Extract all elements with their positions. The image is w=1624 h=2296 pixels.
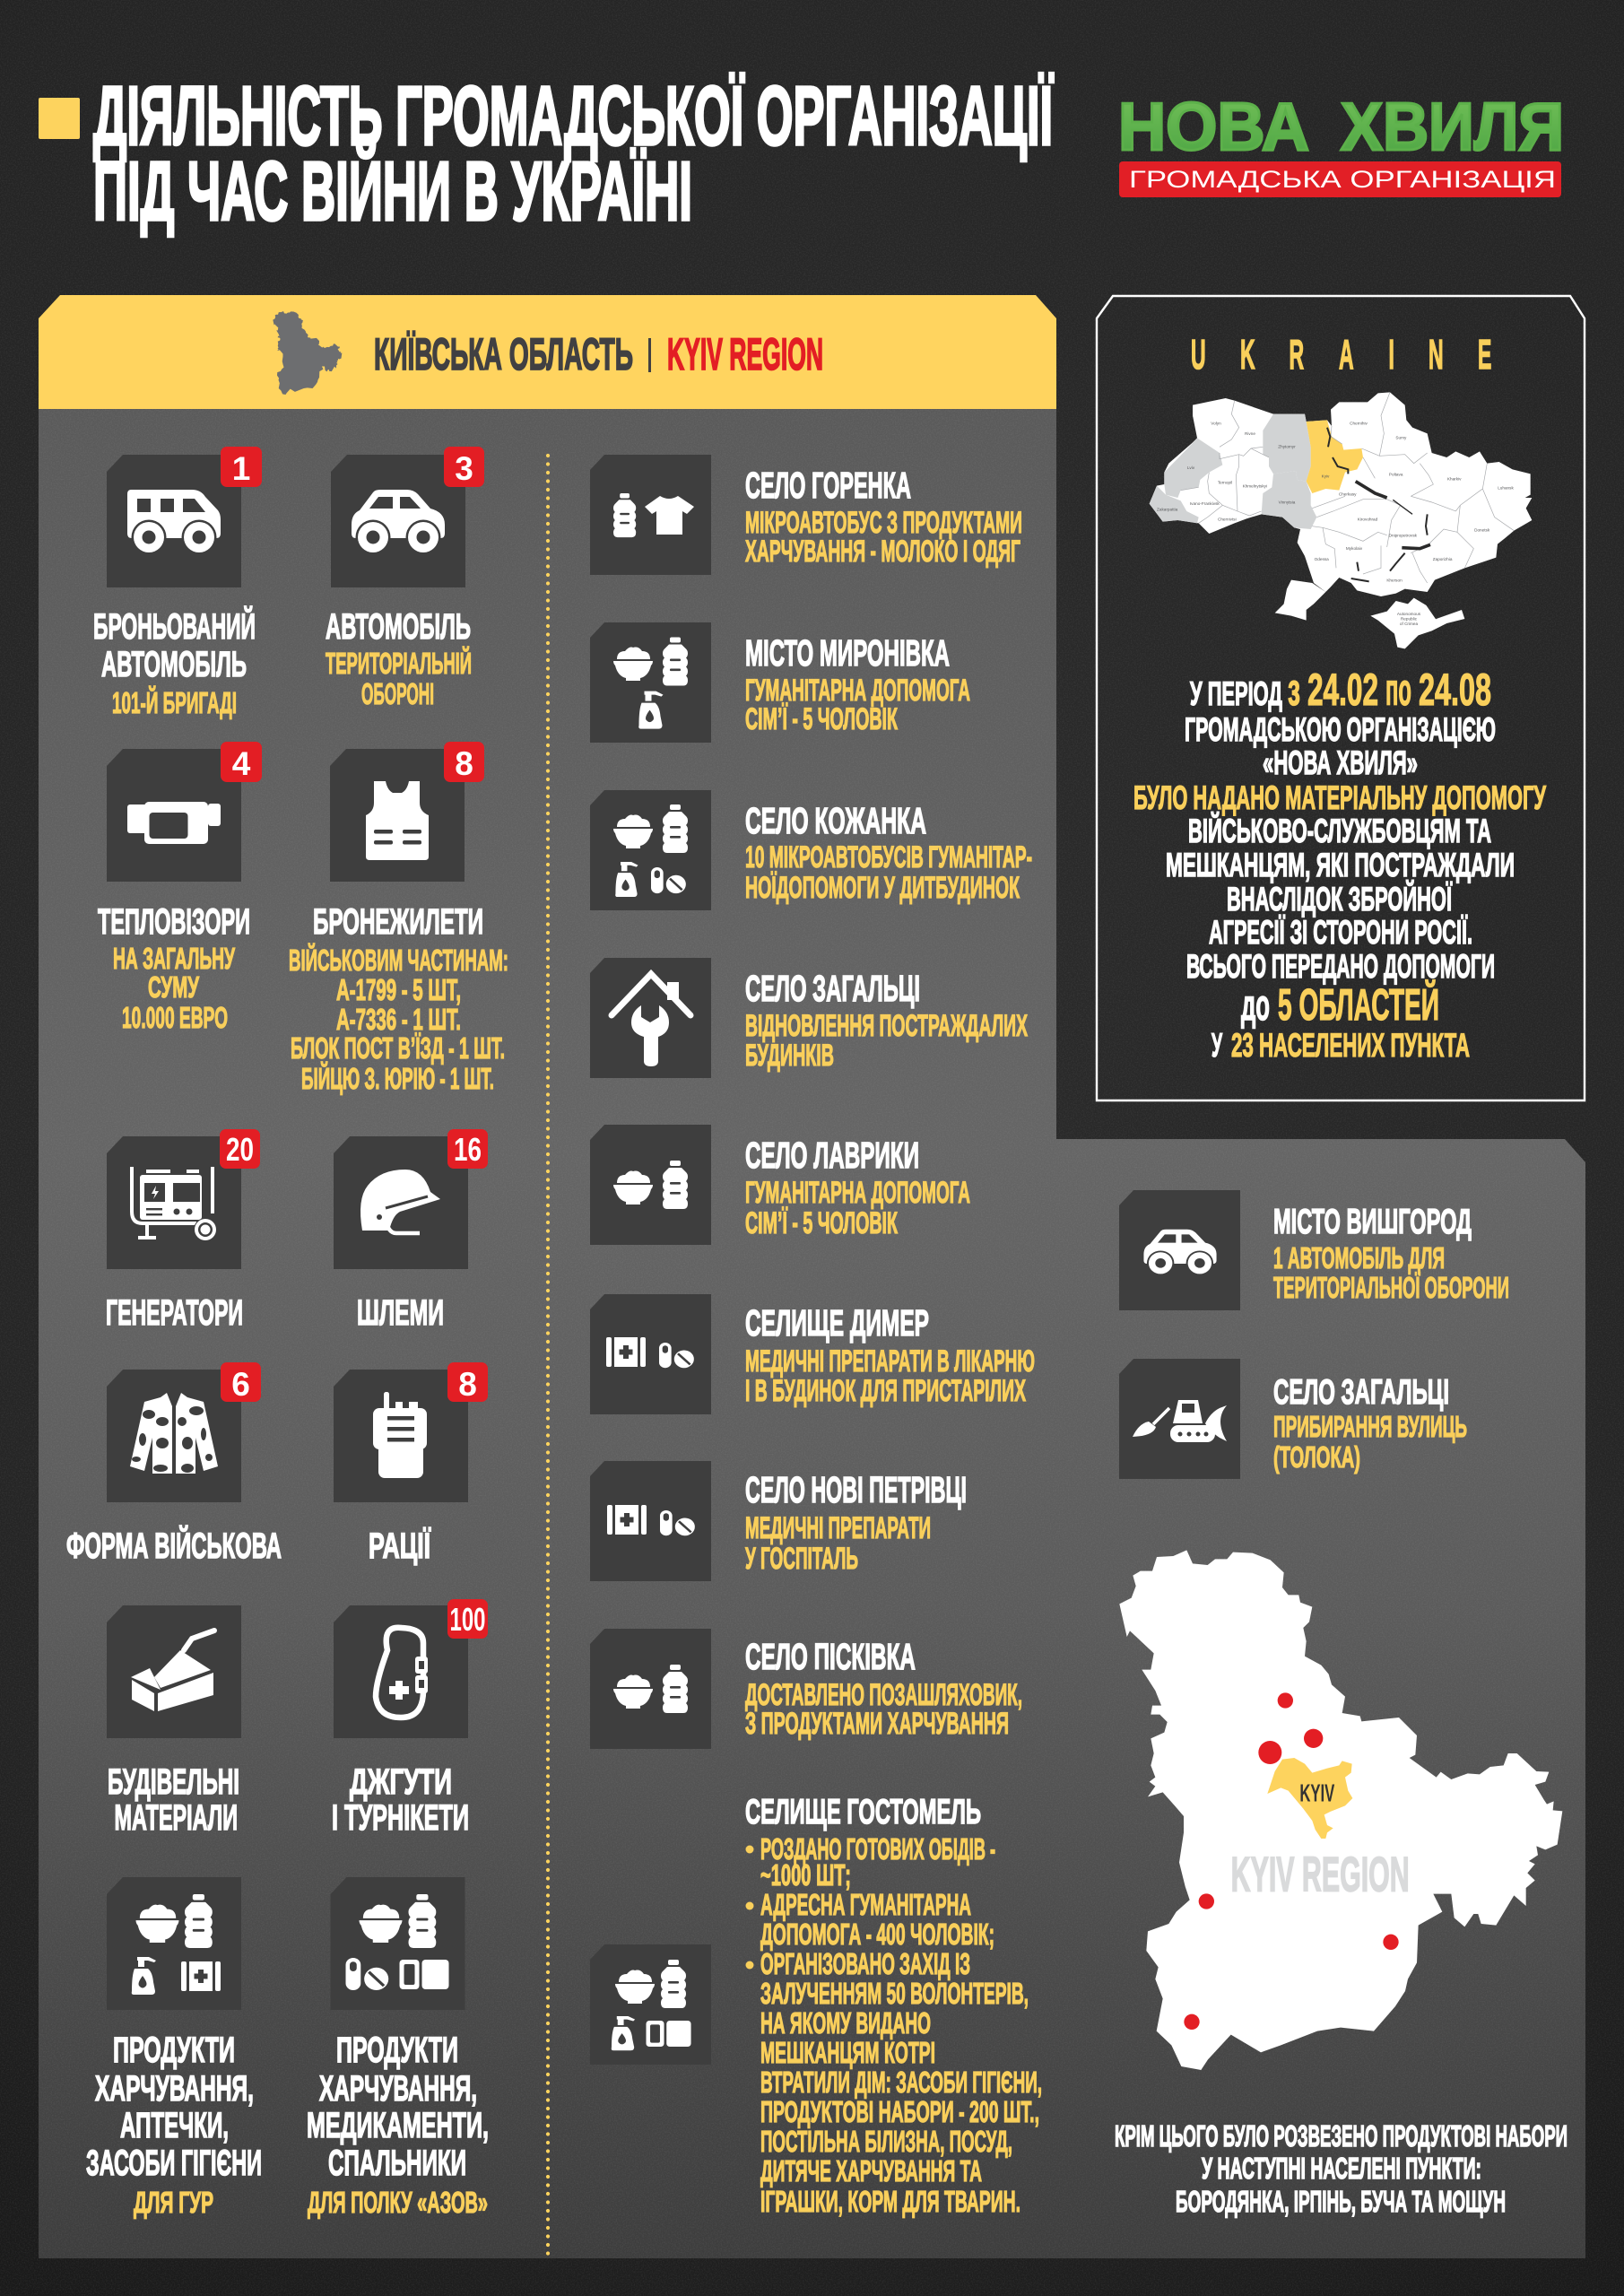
text: ГУМАНІТАРНА ДОПОМОГА bbox=[745, 1176, 970, 1210]
icon: vest bbox=[330, 749, 465, 882]
text: БУДИНКІВ bbox=[745, 1039, 834, 1073]
label: ДЛЯ ГУР bbox=[134, 2186, 213, 2219]
label: ХАРЧУВАННЯ, bbox=[95, 2069, 254, 2109]
map: Ukraine regions: Chernivtsi bbox=[1218, 517, 1237, 522]
map: Ukraine regions: Odessa bbox=[1315, 557, 1329, 561]
icon: generator bbox=[107, 1136, 241, 1269]
label bbox=[326, 607, 472, 710]
label: БІЙЦЮ З. ЮРІЮ - 1 ШТ. bbox=[301, 1061, 494, 1095]
text bbox=[745, 1793, 1042, 2218]
map: Ukraine regions: Lviv bbox=[1187, 465, 1195, 470]
icon: car bbox=[331, 455, 465, 587]
label: БРОНЕЖИЛЕТИ bbox=[313, 902, 483, 942]
badge: 16: 16 bbox=[454, 1131, 482, 1168]
label: 10.000 ЕВРО bbox=[122, 1001, 228, 1034]
text: МЕШКАНЦЯМ КОТРІ bbox=[760, 2036, 935, 2069]
badge: 8 bbox=[447, 1362, 488, 1403]
note on food parcels bbox=[1115, 2119, 1568, 2218]
label: А-1799 - 5 ШТ, bbox=[336, 973, 461, 1006]
icon: food, water, pills, sleeping mat bbox=[330, 1877, 465, 2010]
icon: carabiner tourniquet bbox=[334, 1605, 468, 1738]
text: МІСТО ВИШГОРОД bbox=[1273, 1203, 1472, 1241]
header label: КИЇВСЬКА ОБЛАСТЬ bbox=[374, 329, 633, 379]
map: Ukraine regions: Dnipropetrovsk bbox=[1389, 534, 1418, 538]
map: Ukraine regions: Chernihiv bbox=[1350, 422, 1368, 426]
summary text: ВНАСЛІДОК ЗБРОЙНОЇ bbox=[1227, 880, 1452, 918]
badge: 4 bbox=[221, 742, 262, 782]
map: Ukraine regions: Poltava bbox=[1389, 473, 1403, 477]
icon: helmet bbox=[334, 1136, 468, 1269]
text: РОЗДАНО ГОТОВИХ ОБІДІВ - bbox=[760, 1832, 995, 1866]
map: Ukraine regions: Kyiv bbox=[1322, 474, 1330, 479]
label bbox=[86, 2031, 262, 2219]
label: АВТОМОБІЛЬ bbox=[326, 607, 471, 647]
label: І ТУРНІКЕТИ bbox=[332, 1798, 469, 1838]
map: Ukraine regions: Ivano-Frankivsk bbox=[1190, 501, 1220, 506]
summary text: з bbox=[1288, 665, 1300, 715]
map: Ukraine regions: of Crimea bbox=[1400, 622, 1418, 626]
Kyiv city shape bbox=[1267, 1758, 1352, 1839]
text bbox=[1273, 1373, 1467, 1474]
summary text: до bbox=[1241, 982, 1270, 1030]
text: 10 МІКРОАВТОБУСІВ ГУМАНІТАР- bbox=[745, 840, 1032, 874]
map: Ukraine regions: Zhytomyr bbox=[1278, 445, 1296, 449]
item: body armour bbox=[289, 742, 508, 1095]
map: Ukraine regions: Kharkiv bbox=[1447, 476, 1462, 481]
text: СЕЛО ЗАГАЛЬЦІ bbox=[1273, 1373, 1449, 1412]
text: СЕЛО ГОРЕНКА bbox=[745, 465, 911, 506]
badge: 1: 1 bbox=[232, 450, 250, 487]
icon: walkie talkie bbox=[334, 1370, 468, 1502]
text: СЕЛИЩЕ ГОСТОМЕЛЬ bbox=[745, 1793, 981, 1831]
text: ПОСТІЛЬНА БІЛИЗНА, ПОСУД, bbox=[760, 2125, 1012, 2158]
label: Kyiv region: KYIV REGION bbox=[1231, 1846, 1410, 1901]
map: Kyiv region bbox=[1119, 1550, 1562, 2070]
text bbox=[745, 1135, 970, 1240]
badge: 3: 3 bbox=[455, 450, 473, 487]
icon: minibus bbox=[107, 455, 241, 587]
dotted divider bbox=[546, 456, 550, 2257]
main title: ПІД ЧАС ВІЙНИ В УКРАЇНІ bbox=[93, 144, 692, 238]
map: Ukraine regions: Autonomous bbox=[1397, 612, 1421, 616]
text: ДОСТАВЛЕНО ПОЗАШЛЯХОВИК, bbox=[745, 1678, 1022, 1712]
label: ДЖГУТИ bbox=[350, 1762, 452, 1802]
logo: Нова Хвиля bbox=[1118, 89, 1564, 197]
text: ЗАЛУЧЕННЯМ 50 ВОЛОНТЕРІВ, bbox=[760, 1977, 1029, 2010]
label: СУМУ bbox=[148, 970, 199, 1004]
entry: Пісківка bbox=[590, 1629, 1022, 1749]
header label: KYIV REGION bbox=[667, 329, 823, 379]
entry: Загальці bbox=[590, 958, 1028, 1078]
text bbox=[745, 968, 1028, 1073]
label: РАЦІЇ bbox=[369, 1526, 431, 1566]
text bbox=[745, 465, 1022, 569]
label bbox=[93, 605, 256, 719]
text: ХАРЧУВАННЯ - МОЛОКО І ОДЯГ bbox=[745, 535, 1020, 569]
map: Ukraine regions: Zakarpattia bbox=[1157, 508, 1178, 512]
badge: 4: 4 bbox=[232, 745, 251, 782]
icon: food and water bbox=[590, 1125, 711, 1245]
icon: food and water bbox=[590, 1629, 711, 1749]
map: Ukraine regions: Cherkasy bbox=[1339, 492, 1357, 497]
badge: 3 bbox=[444, 447, 484, 487]
map: Ukraine regions: Rivne bbox=[1245, 431, 1255, 436]
text: ДОПОМОГА - 400 ЧОЛОВІК; bbox=[760, 1918, 994, 1951]
badge: 6: 6 bbox=[231, 1366, 250, 1403]
text: СЕЛО КОЖАНКА bbox=[745, 800, 926, 841]
panel: supplied items grid bbox=[66, 447, 508, 2219]
text: ~1000 ШТ; bbox=[760, 1858, 851, 1892]
item: generators bbox=[106, 1129, 260, 1333]
red location dots bbox=[1184, 1692, 1399, 2030]
badge: 8: 8 bbox=[458, 1366, 477, 1403]
text bbox=[745, 1302, 1035, 1408]
panel: Ukraine summary bbox=[1097, 296, 1585, 1100]
map: Ukraine regions: Kherson bbox=[1386, 578, 1403, 583]
label bbox=[307, 2031, 489, 2219]
entry: Вишгород bbox=[1119, 1190, 1509, 1310]
badge: 6 bbox=[221, 1362, 261, 1403]
text: ПРОДУКТОВІ НАБОРИ - 200 ШТ., bbox=[760, 2095, 1039, 2128]
summary text: 24.08 bbox=[1419, 665, 1491, 715]
item: car bbox=[326, 447, 484, 710]
logo: Нова Хвиля: ГРОМАДСЬКА ОРГАНІЗАЦІЯ bbox=[1129, 166, 1556, 193]
icon: thermal imager bbox=[107, 749, 241, 882]
icon: house and wrench bbox=[590, 958, 711, 1078]
label bbox=[98, 902, 250, 1034]
icon: bottle and shirt bbox=[590, 455, 711, 575]
summary text bbox=[1133, 665, 1547, 1064]
summary text: 5 ОБЛАСТЕЙ bbox=[1278, 980, 1439, 1030]
entry: Димер bbox=[590, 1294, 1035, 1414]
entry: Гостомель bbox=[590, 1793, 1042, 2218]
item: helmets bbox=[334, 1129, 488, 1333]
item: building materials bbox=[107, 1605, 241, 1838]
item: thermal imagers bbox=[98, 742, 262, 1034]
logo: Нова Хвиля: НОВА bbox=[1118, 89, 1309, 164]
text: ПРИБИРАННЯ ВУЛИЦЬ bbox=[1273, 1410, 1467, 1443]
text: ГУМАНІТАРНА ДОПОМОГА bbox=[745, 674, 970, 708]
summary text: 23 НАСЕЛЕНИХ ПУНКТА bbox=[1231, 1027, 1470, 1064]
map: Ukraine regions: Republic bbox=[1401, 616, 1418, 621]
text: НОЇДОПОМОГИ У ДИТБУДИНОК bbox=[745, 871, 1020, 905]
text: АДРЕСНА ГУМАНІТАРНА bbox=[760, 1888, 971, 1921]
entry: Нові Петрівці bbox=[590, 1461, 967, 1581]
main title bbox=[93, 69, 1054, 238]
label: АВТОМОБІЛЬ bbox=[101, 645, 247, 684]
icon: camouflage jacket bbox=[107, 1370, 241, 1502]
label bbox=[332, 1762, 469, 1838]
text: СЕЛО ЗАГАЛЬЦІ bbox=[745, 968, 920, 1009]
summary text: У ПЕРІОД bbox=[1190, 675, 1282, 712]
label: ФОРМА ВІЙСЬКОВА bbox=[66, 1525, 282, 1566]
icon: first aid and pills bbox=[590, 1461, 711, 1581]
item: tourniquets bbox=[332, 1599, 488, 1838]
label: ШЛЕМИ bbox=[357, 1293, 444, 1333]
logo: Нова Хвиля: ХВИЛЯ bbox=[1341, 89, 1564, 164]
map: Ukraine regions: Mykolaiv bbox=[1346, 546, 1363, 551]
map: Ukraine regions: Luhansk bbox=[1498, 485, 1514, 490]
label: ТЕРИТОРІАЛЬНІЙ bbox=[326, 646, 472, 680]
label: БУДІВЕЛЬНІ bbox=[108, 1762, 239, 1802]
text bbox=[745, 1469, 967, 1576]
text bbox=[1273, 1203, 1509, 1304]
text: ОРГАНІЗОВАНО ЗАХІД ІЗ bbox=[760, 1947, 970, 1980]
map: Ukraine regions: Vinnytsia bbox=[1279, 500, 1296, 504]
icon: food, water, soap, first aid bbox=[107, 1877, 241, 2010]
text: СІМ’Ї - 5 ЧОЛОВІК bbox=[745, 1206, 898, 1240]
text: СЕЛО ПІСКІВКА bbox=[745, 1636, 916, 1677]
entry: Загальці cleanup bbox=[1119, 1359, 1467, 1479]
badge: 1 bbox=[221, 447, 262, 487]
label: НА ЗАГАЛЬНУ bbox=[113, 942, 235, 975]
label: Kyiv: KYIV bbox=[1299, 1779, 1335, 1806]
heading: Ukraine: UKRAINE bbox=[1191, 331, 1491, 378]
label: МЕДИКАМЕНТИ, bbox=[307, 2106, 489, 2145]
label: ЗАСОБИ ГІГІЄНИ bbox=[86, 2144, 262, 2183]
map: Ukraine regions: Ternopil bbox=[1218, 481, 1232, 485]
text: І В БУДИНОК ДЛЯ ПРИСТАРІЛИХ bbox=[745, 1374, 1026, 1408]
text: ДИТЯЧЕ ХАРЧУВАННЯ ТА bbox=[760, 2154, 982, 2187]
text: У ГОСПІТАЛЬ bbox=[745, 1542, 858, 1576]
item: radios bbox=[334, 1362, 488, 1566]
text: СЕЛО НОВІ ПЕТРІВЦІ bbox=[745, 1469, 967, 1510]
text: МІКРОАВТОБУС З ПРОДУКТАМИ bbox=[745, 506, 1022, 540]
badge: 8 bbox=[444, 742, 484, 782]
label: ХАРЧУВАННЯ, bbox=[319, 2069, 477, 2109]
entry: Горенка bbox=[590, 455, 1022, 575]
summary text: У bbox=[1211, 1027, 1223, 1064]
panel: Kyiv region extras bbox=[1115, 1190, 1568, 2218]
label: СПАЛЬНИКИ bbox=[328, 2144, 466, 2183]
label bbox=[289, 902, 508, 1095]
label: МАТЕРІАЛИ bbox=[115, 1798, 238, 1838]
icon: first aid and pills bbox=[590, 1294, 711, 1414]
label: ГЕНЕРАТОРИ bbox=[106, 1293, 243, 1333]
icon: brick and trowel bbox=[107, 1605, 241, 1738]
icon: food, water, soap, pills bbox=[590, 790, 711, 910]
text: МЕДИЧНІ ПРЕПАРАТИ В ЛІКАРНЮ bbox=[745, 1344, 1035, 1378]
map: Ukraine regions: Kirovohrad bbox=[1358, 517, 1378, 521]
badge: 20: 20 bbox=[226, 1131, 254, 1168]
text: МІСТО МИРОНІВКА bbox=[745, 632, 950, 674]
main grey panel bbox=[39, 409, 1585, 2258]
badge: 8: 8 bbox=[455, 745, 473, 782]
item: military uniform bbox=[66, 1362, 282, 1566]
icon: car bbox=[1119, 1190, 1240, 1310]
item: armoured vehicle bbox=[93, 447, 262, 719]
summary text: по bbox=[1385, 665, 1411, 715]
label: ТЕПЛОВІЗОРИ bbox=[98, 902, 250, 942]
label: ВІЙСЬКОВИМ ЧАСТИНАМ: bbox=[289, 943, 508, 977]
yellow header: Kyiv region bbox=[39, 295, 1056, 409]
text: НА ЯКОМУ ВИДАНО bbox=[760, 2006, 931, 2039]
map: Ukraine regions bbox=[1150, 392, 1532, 648]
map: Ukraine regions: Sumy bbox=[1395, 435, 1407, 439]
icon: Kyiv region silhouette bbox=[273, 311, 342, 395]
text: ВТРАТИЛИ ДІМ: ЗАСОБИ ГІГІЄНИ, bbox=[760, 2066, 1042, 2099]
entry: Кожанка bbox=[590, 790, 1032, 910]
label: А-7336 - 1 ШТ. bbox=[336, 1003, 461, 1036]
map: Ukraine regions: Donetsk bbox=[1474, 528, 1490, 533]
icon: food, water, soap bbox=[590, 622, 711, 743]
badge: 100 bbox=[447, 1599, 488, 1639]
text: 1 АВТОМОБІЛЬ ДЛЯ bbox=[1273, 1241, 1445, 1274]
label: ПРОДУКТИ bbox=[113, 2031, 235, 2070]
map: Ukraine regions: Volyn bbox=[1211, 421, 1221, 425]
text: МЕДИЧНІ ПРЕПАРАТИ bbox=[745, 1511, 931, 1545]
text: (ТОЛОКА) bbox=[1273, 1440, 1360, 1474]
item: food, first-aid kits, hygiene bbox=[86, 1877, 262, 2219]
icon: food, water, soap, sleeping mat bbox=[590, 1944, 711, 2065]
text bbox=[745, 1636, 1022, 1741]
text bbox=[745, 632, 970, 736]
text bbox=[745, 800, 1032, 905]
label: ПРОДУКТИ bbox=[336, 2031, 458, 2070]
title marker square bbox=[39, 98, 80, 139]
text: СЕЛО ЛАВРИКИ bbox=[745, 1135, 919, 1176]
label: БРОНЬОВАНИЙ bbox=[93, 605, 256, 647]
label: ОБОРОНІ bbox=[361, 677, 434, 710]
text: З ПРОДУКТАМИ ХАРЧУВАННЯ bbox=[745, 1707, 1009, 1741]
panel: settlements list bbox=[590, 455, 1042, 2218]
text: СІМ’Ї - 5 ЧОЛОВІК bbox=[745, 702, 898, 736]
entry: Лаврики bbox=[590, 1125, 970, 1245]
text: ВІДНОВЛЕННЯ ПОСТРАЖДАЛИХ bbox=[745, 1009, 1028, 1043]
label bbox=[108, 1762, 239, 1838]
label: 101-Й БРИГАДІ bbox=[112, 685, 237, 719]
label: БЛОК ПОСТ В’ЇЗД - 1 ШТ. bbox=[291, 1031, 505, 1065]
badge: 100: 100 bbox=[450, 1601, 486, 1638]
entry: Миронівка bbox=[590, 622, 970, 743]
text: СЕЛИЩЕ ДИМЕР bbox=[745, 1302, 929, 1344]
label: ДЛЯ ПОЛКУ «АЗОВ» bbox=[308, 2186, 488, 2219]
summary text: «НОВА ХВИЛЯ» bbox=[1263, 744, 1418, 781]
icon: broom and bulldozer bbox=[1119, 1359, 1240, 1479]
map: Ukraine regions: Zaporizhia bbox=[1433, 557, 1453, 561]
summary text: 24.02 bbox=[1307, 665, 1378, 715]
label: АПТЕЧКИ, bbox=[120, 2106, 229, 2145]
map: Ukraine regions: Khmelnytskyi bbox=[1243, 483, 1267, 488]
item: food, medicine, sleeping bags bbox=[307, 1877, 489, 2219]
text: ІГРАШКИ, КОРМ ДЛЯ ТВАРИН. bbox=[760, 2185, 1020, 2218]
